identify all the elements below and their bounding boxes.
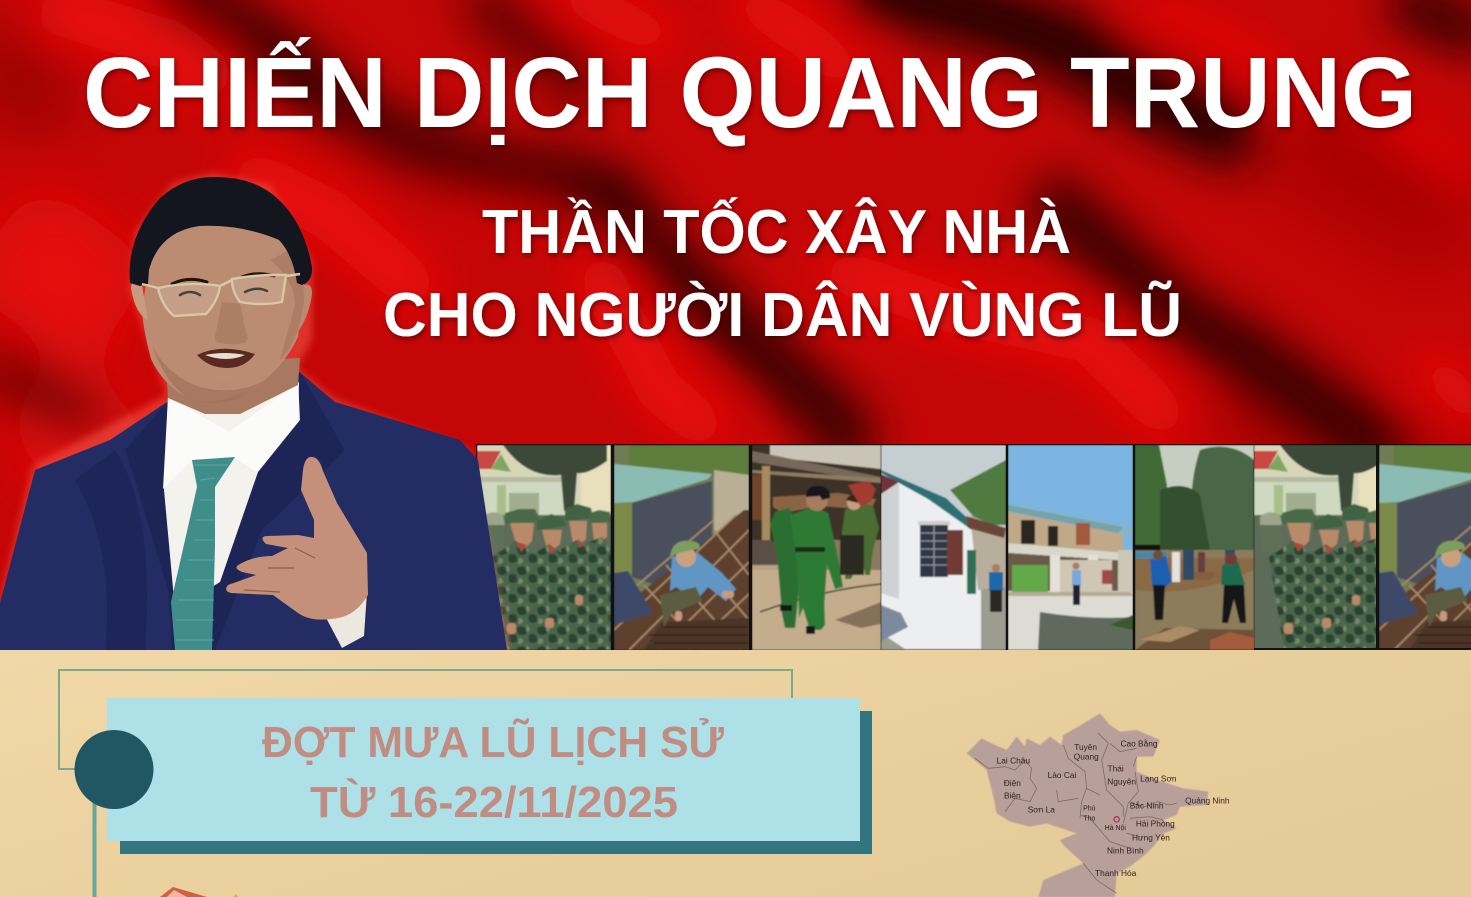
hand	[226, 457, 368, 620]
map of northern Vietnam: Tuyên	[1074, 742, 1097, 752]
banner text line 1: ĐỢT MƯA LŨ LỊCH SỬ	[262, 716, 724, 767]
title: CHIẾN DỊCH QUANG TRUNG	[83, 37, 1417, 149]
face	[142, 217, 304, 402]
cuff	[323, 592, 367, 648]
map of northern Vietnam: Sơn La	[1028, 804, 1055, 814]
map of northern Vietnam: Lào Cai	[1048, 770, 1076, 780]
photo: volunteers and trees	[1135, 445, 1255, 650]
frame outline	[59, 670, 792, 769]
shirt and collar	[164, 378, 300, 610]
map of northern Vietnam: Ninh Bình	[1107, 845, 1144, 855]
banner box	[107, 698, 860, 841]
subtitle line 2: CHO NGƯỜI DÂN VÙNG LŨ	[383, 281, 1182, 350]
map of northern Vietnam: Nguyên	[1107, 777, 1136, 787]
photo: police carrying timber	[752, 445, 881, 650]
map of northern Vietnam: Biên	[1004, 790, 1021, 800]
circle marker	[74, 730, 154, 809]
province labels: Lai Châu	[997, 756, 1030, 766]
suit	[0, 370, 507, 650]
map of northern Vietnam: Thanh Hóa	[1095, 868, 1137, 878]
banner shadow	[120, 711, 872, 854]
photo: white house	[881, 445, 1006, 650]
tie	[171, 457, 235, 650]
photo: two-storey house	[1008, 445, 1133, 650]
dark bands	[160, 0, 860, 460]
map of northern Vietnam: Hải Phòng	[1136, 818, 1175, 828]
heading banner	[107, 698, 872, 854]
halo	[0, 173, 510, 650]
hair	[130, 177, 312, 286]
map of northern Vietnam: Quang	[1074, 752, 1099, 762]
icon: house roof	[160, 887, 238, 897]
lower section background	[0, 650, 1471, 897]
map of northern Vietnam	[967, 713, 1230, 897]
photo: soldiers repeat	[1254, 445, 1388, 650]
flag background	[0, 0, 1471, 650]
photo strip	[476, 444, 1471, 650]
map of northern Vietnam: Hưng Yên	[1132, 832, 1170, 842]
subtitle line 1: THẦN TỐC XÂY NHÀ	[482, 198, 1071, 267]
map of northern Vietnam: Bắc Ninh	[1130, 801, 1164, 811]
map of northern Vietnam: Quảng Ninh	[1185, 795, 1230, 805]
neck	[166, 358, 300, 414]
portrait: Prime Minister	[0, 173, 510, 650]
vertical timeline line	[92, 800, 96, 897]
map of northern Vietnam: Phú	[1083, 805, 1096, 812]
photo: roof repair repeat	[1379, 445, 1471, 650]
map of northern Vietnam: Hà Nội	[1105, 825, 1126, 832]
nose and mouth	[215, 302, 248, 344]
map of northern Vietnam: Lạng Sơn	[1140, 774, 1177, 784]
glasses	[142, 274, 300, 316]
map of northern Vietnam: Cao Bằng	[1120, 739, 1158, 749]
photo: soldiers	[477, 445, 611, 650]
banner text line 2: TỪ 16-22/11/2025	[310, 777, 678, 827]
map of northern Vietnam: Thái	[1108, 764, 1124, 774]
eyes and brows	[172, 274, 274, 295]
map of northern Vietnam: Điện	[1004, 778, 1021, 788]
photo: roof repair	[614, 445, 750, 650]
map of northern Vietnam: Thọ	[1083, 816, 1095, 823]
bright streaks	[40, 5, 430, 300]
